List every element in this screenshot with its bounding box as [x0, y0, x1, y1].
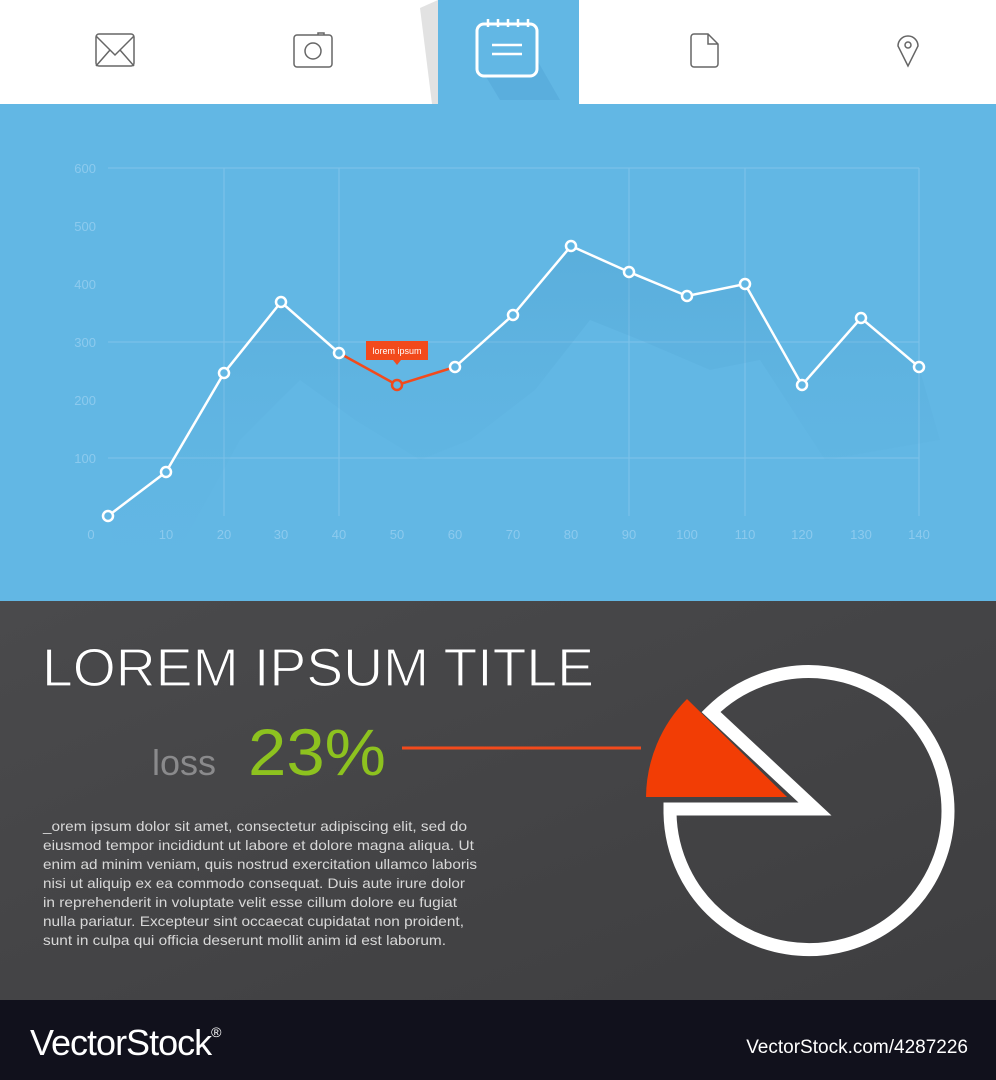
body text: nisi ut aliquip ex ea commodo consequat. Duis aute irure dolor: [43, 875, 465, 891]
x axis labels: 40: [332, 527, 346, 542]
y axis labels: 200: [74, 393, 96, 408]
x axis labels: 110: [735, 527, 755, 542]
x axis labels: 90: [622, 527, 636, 542]
y axis labels: 600: [74, 161, 96, 176]
top nav bar: [0, 0, 996, 104]
callout: lorem ipsum: [372, 346, 422, 356]
title: LOREM IPSUM TITLE: [42, 638, 594, 698]
x axis labels: 50: [390, 527, 404, 542]
y axis labels: 100: [74, 451, 96, 466]
stat: loss 23%: [152, 715, 386, 789]
body text: enim ad minim veniam, quis nostrud exercitation ullamco laboris: [43, 856, 477, 872]
x axis labels: 30: [274, 527, 288, 542]
data line: [108, 302, 339, 516]
pie chart: [646, 672, 948, 950]
icon: envelope: [96, 34, 134, 66]
panel: bottom dark: [0, 601, 996, 1000]
stat: loss 23%: 23%: [248, 715, 386, 789]
footer watermark: VectorStock.com/4287226: [746, 1037, 968, 1058]
stat: loss 23%: loss: [152, 742, 216, 783]
y axis labels: [74, 161, 96, 466]
body text: eiusmod tempor incididunt ut labore et dolore magna aliqua. Ut: [43, 837, 474, 853]
x axis labels: 60: [448, 527, 462, 542]
footer watermark: ®: [211, 1024, 222, 1040]
footer watermark: [0, 1000, 996, 1080]
body text: in reprehenderit in voluptate velit esse cillum dolore eu fugiat: [43, 894, 457, 910]
panel: line chart: [0, 104, 996, 601]
chart shadow: [108, 246, 940, 600]
x axis labels: 120: [791, 527, 813, 542]
body text: nulla pariatur. Excepteur sint occaecat cupidatat non proident,: [43, 913, 464, 929]
x axis labels: 10: [159, 527, 173, 542]
y axis labels: 300: [74, 335, 96, 350]
x axis labels: 20: [217, 527, 231, 542]
x axis labels: 140: [908, 527, 930, 542]
icon: document: [691, 34, 718, 67]
icon: notepad: [477, 19, 560, 100]
x axis labels: [87, 527, 930, 542]
x axis labels: 80: [564, 527, 578, 542]
body text: _orem ipsum dolor sit amet, consectetur adipiscing elit, sed do: [42, 818, 467, 834]
body text: [42, 818, 477, 948]
icon: camera: [294, 33, 332, 67]
y axis labels: 500: [74, 219, 96, 234]
icon: map pin: [898, 36, 918, 66]
callout: [366, 341, 428, 365]
x axis labels: 70: [506, 527, 520, 542]
x axis labels: 0: [87, 527, 95, 542]
body text: sunt in culpa qui officia deserunt mollit anim id est laborum.: [43, 932, 446, 948]
y axis labels: 400: [74, 277, 96, 292]
footer watermark: VectorStock: [30, 1022, 211, 1063]
x axis labels: 130: [850, 527, 872, 542]
x axis labels: 100: [676, 527, 698, 542]
